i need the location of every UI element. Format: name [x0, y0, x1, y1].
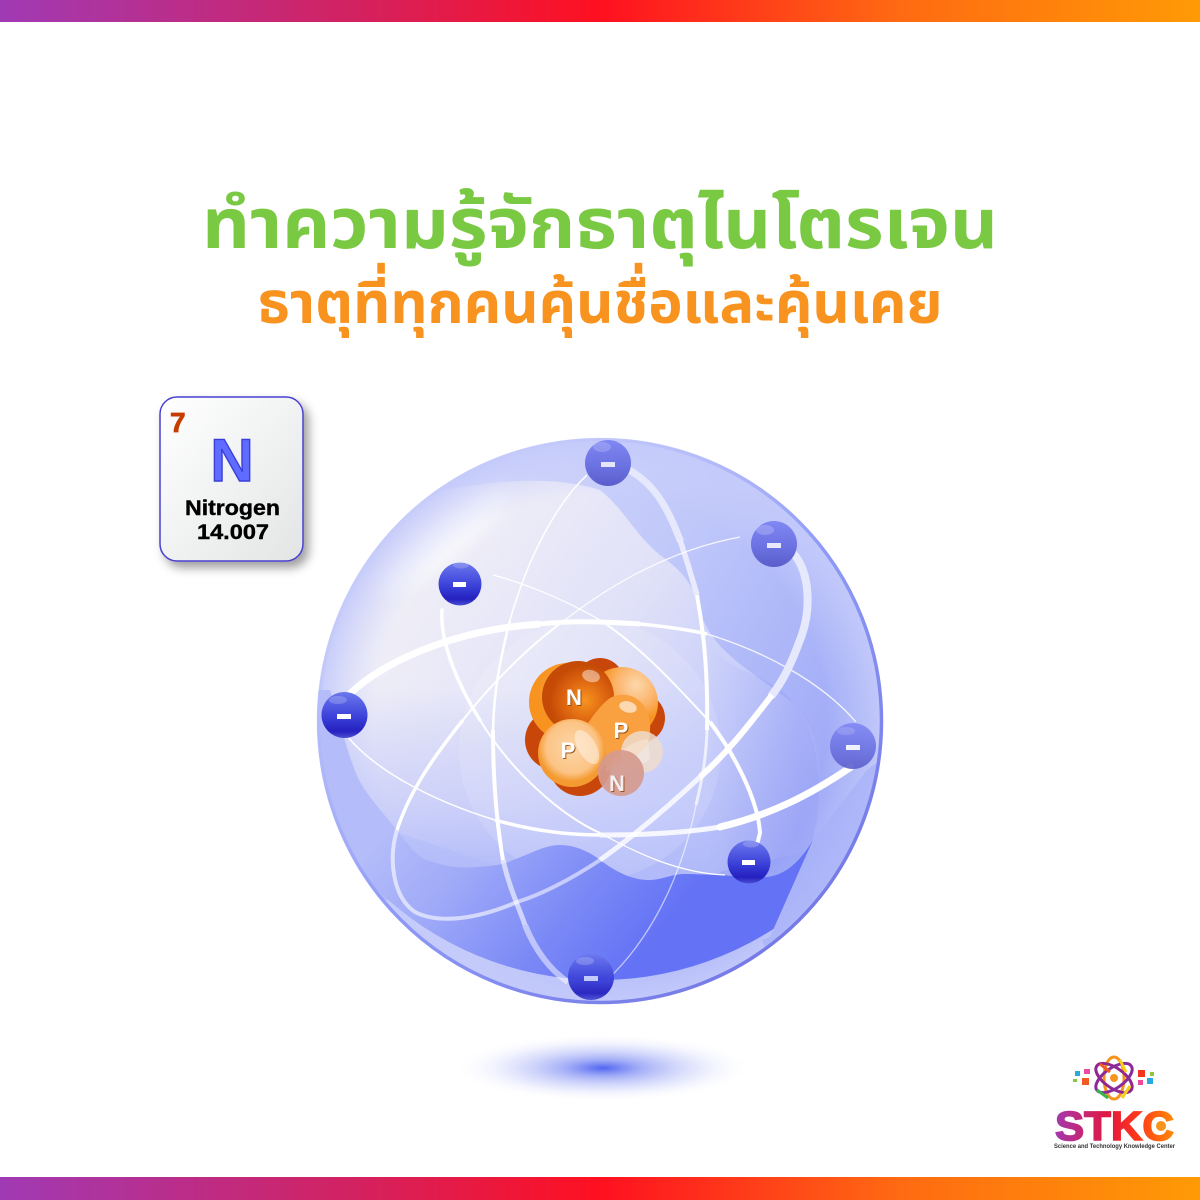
orbit: diagonal ring rising right [393, 537, 808, 919]
electron upper right [751, 521, 797, 567]
electron right [830, 723, 876, 769]
title line 2: ธาตุที่ทุกคนคุ้นชื่อและคุ้นเคย [258, 262, 942, 350]
neutron bottom: N [609, 771, 625, 796]
proton left: P [561, 738, 575, 763]
logo C dot [1156, 1121, 1166, 1131]
logo tagline: Science and Technology Knowledge Center [1054, 1144, 1176, 1150]
element symbol: N [210, 427, 254, 494]
electron left [322, 692, 368, 738]
orbit: horizontal ring [344, 622, 856, 835]
electron bottom [568, 954, 614, 1000]
neutron top: N [566, 685, 582, 710]
atomic mass: 14.007 [197, 521, 269, 544]
orbits [344, 466, 856, 982]
element card: nitrogen [160, 397, 303, 561]
proton right: P [614, 718, 628, 743]
electron top [585, 440, 631, 486]
bottom gradient bar [0, 1177, 1200, 1200]
atomic number: 7 [170, 407, 186, 438]
orbit: vertical ring [493, 466, 707, 982]
title line 1: ทำความรู้จักธาตุไนโตรเจน [202, 174, 998, 280]
logo pixel squares [1073, 1069, 1154, 1085]
electron lower right [728, 840, 770, 884]
logo wordmark: STKC [1055, 1103, 1174, 1149]
title [202, 174, 998, 350]
orbit: diagonal ring falling right [442, 575, 760, 875]
logo atom icon [1091, 1057, 1137, 1099]
logo: STKC [1054, 1057, 1176, 1150]
atom sphere [300, 430, 890, 1010]
sphere shadow [453, 1034, 753, 1102]
electron upper left [438, 562, 482, 606]
nucleus [525, 658, 665, 796]
element name: Nitrogen [185, 497, 280, 520]
top gradient bar [0, 0, 1200, 22]
